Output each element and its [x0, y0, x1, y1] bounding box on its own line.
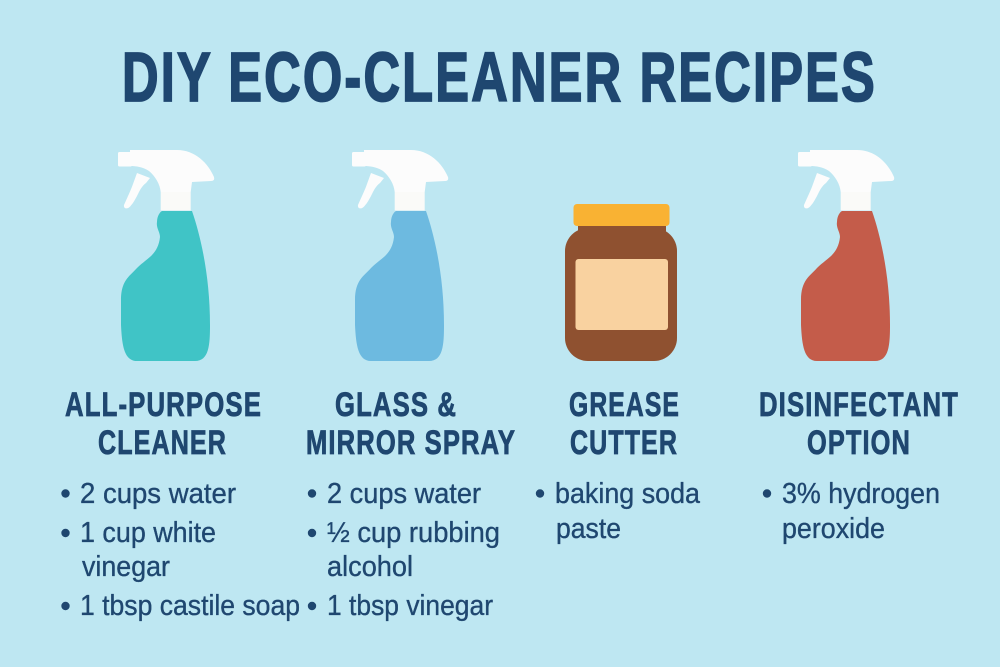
- ingredient list: all-purpose cleaner: 1 cup white: [80, 517, 216, 549]
- ingredient list: disinfectant option: [763, 478, 940, 545]
- icon: jar: [565, 204, 677, 361]
- heading: all-purpose cleaner: ALL-PURPOSE: [65, 386, 262, 424]
- heading: all-purpose cleaner: [65, 386, 262, 462]
- heading: grease cutter: GREASE: [569, 386, 680, 424]
- ingredient list: all-purpose cleaner: [61, 478, 300, 622]
- heading: glass and mirror spray: MIRROR SPRAY: [306, 424, 516, 462]
- ingredient list: glass and mirror spray: [308, 478, 500, 622]
- panel: all-purpose cleaner: [61, 150, 300, 622]
- ingredient list: grease cutter: baking soda: [555, 478, 701, 510]
- ingredient list: glass and mirror spray: 1 tbsp vinegar: [327, 590, 493, 622]
- heading: disinfectant option: OPTION: [807, 424, 911, 462]
- heading: glass and mirror spray: [306, 386, 516, 462]
- ingredient list: grease cutter: [536, 478, 701, 545]
- icon: red spray bottle: [798, 150, 894, 361]
- ingredient list: grease cutter: paste: [556, 513, 621, 545]
- ingredient list: disinfectant option: peroxide: [782, 513, 885, 545]
- ingredient list: all-purpose cleaner: 2 cups water: [80, 478, 236, 510]
- heading: grease cutter: [569, 386, 680, 462]
- ingredient list: glass and mirror spray: 2 cups water: [327, 478, 481, 510]
- heading: glass and mirror spray: GLASS &: [335, 386, 457, 424]
- ingredient list: all-purpose cleaner: 1 tbsp castile soap: [80, 590, 300, 622]
- panel: glass and mirror spray: [306, 150, 516, 622]
- ingredient list: disinfectant option: 3% hydrogen: [782, 478, 940, 510]
- ingredient list: glass and mirror spray: alcohol: [327, 551, 413, 583]
- icon: blue spray bottle: [352, 150, 448, 361]
- icon: teal spray bottle: [118, 150, 214, 361]
- heading: disinfectant option: [759, 386, 959, 462]
- panel: disinfectant option: [759, 150, 959, 545]
- ingredient list: all-purpose cleaner: vinegar: [82, 551, 170, 583]
- heading: all-purpose cleaner: CLEANER: [98, 424, 227, 462]
- panel: grease cutter: [536, 204, 701, 545]
- heading: grease cutter: CUTTER: [570, 424, 678, 462]
- ingredient list: glass and mirror spray: ½ cup rubbing: [327, 517, 500, 549]
